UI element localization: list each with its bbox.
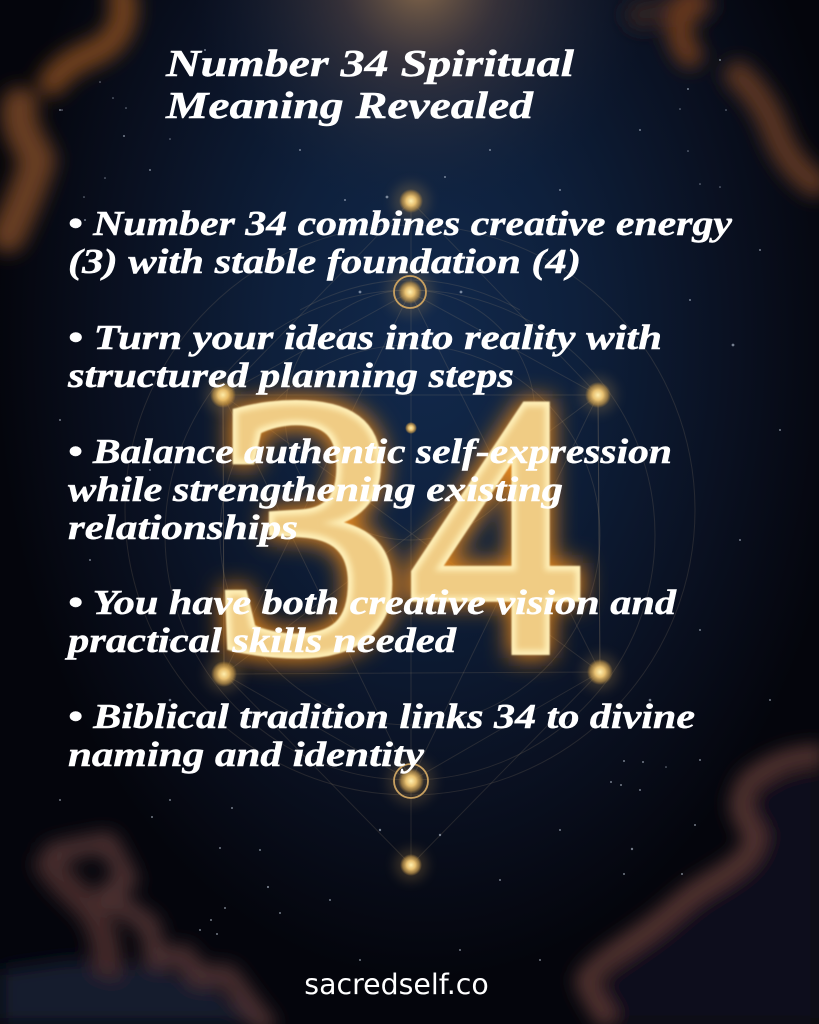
bullet: self-expression and relationships: relationships [68, 509, 298, 547]
stars [59, 49, 781, 961]
glowing number 34 [212, 321, 581, 731]
glowing number 34: 4 [409, 321, 581, 731]
bullet: biblical tradition: • Biblical tradition links 34 to divine [68, 698, 695, 736]
bullet: vision and skills: practical skills needed [64, 622, 457, 660]
bullet: self-expression and relationships: while strengthening existing [68, 471, 563, 509]
clouds: bottom right [585, 755, 819, 1024]
clouds: top right [640, 0, 815, 183]
glowing number 34: 4 [409, 321, 581, 731]
bullet: ideas into reality: • Turn your ideas into reality with [68, 319, 662, 357]
clouds: bottom left [0, 842, 270, 1024]
glowing number 34: 3 [212, 321, 402, 731]
glowing number 34: 3 [212, 321, 402, 731]
bullet: ideas into reality [67, 319, 662, 395]
bullet: ideas into reality: structured planning steps [67, 357, 514, 395]
sacred geometry lines [125, 201, 695, 865]
node glows and stars of the geometry [205, 183, 618, 881]
title [165, 43, 575, 127]
bullet: biblical tradition [68, 698, 695, 774]
bullet: vision and skills [64, 584, 677, 660]
title: Number 34 Spiritual [165, 43, 575, 85]
bullet: creative energy and foundation: • Number 34 combines creative energy [68, 205, 733, 243]
footer: website: sacredself.co [304, 968, 489, 1001]
glowing number 34: 4 [409, 321, 581, 731]
bullet: self-expression and relationships: • Balance authentic self-expression [68, 433, 672, 471]
title: Meaning Revealed [165, 85, 534, 127]
glowing number 34: 3 [212, 321, 402, 731]
bullet: creative energy and foundation [68, 205, 733, 281]
bullet: biblical tradition: naming and identity [68, 736, 425, 774]
bullet: self-expression and relationships [68, 433, 672, 547]
bullet: creative energy and foundation: (3) with stable foundation (4) [68, 243, 581, 281]
bullet: vision and skills: • You have both creative vision and [68, 584, 677, 622]
clouds: top left [8, 0, 124, 235]
